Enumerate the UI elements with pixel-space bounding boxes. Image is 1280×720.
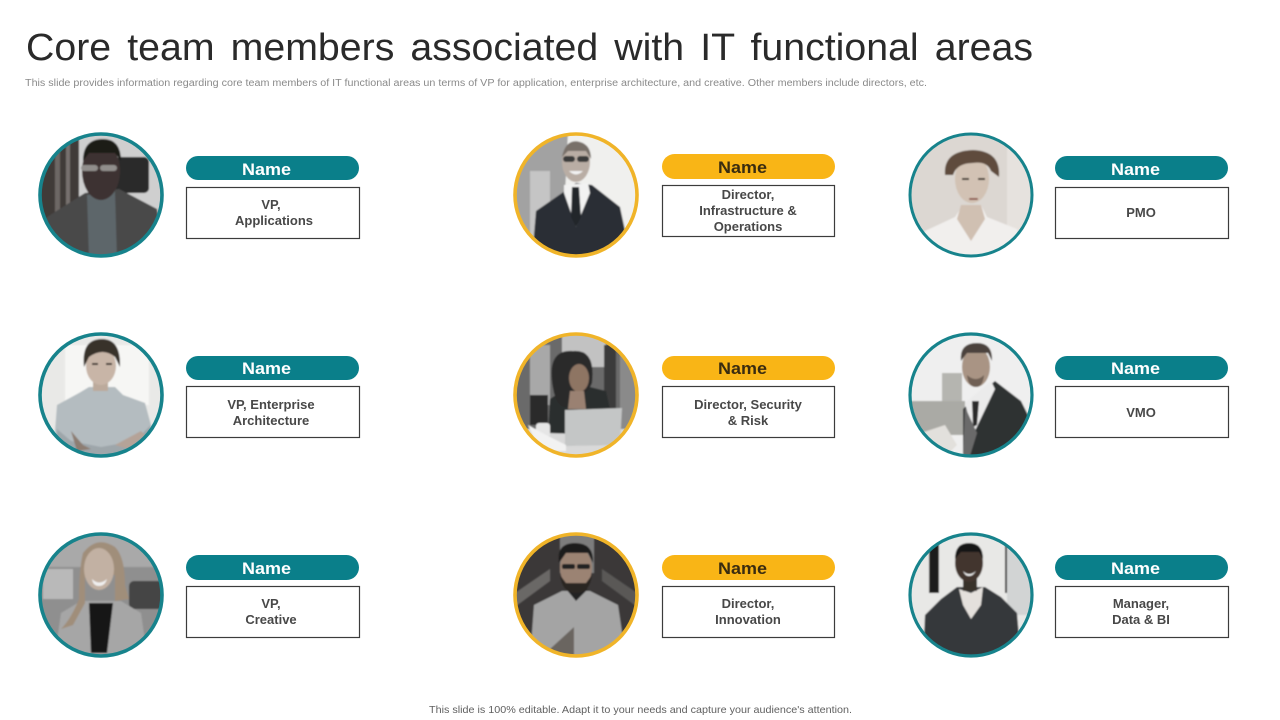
role box: Director, Security <box>694 397 803 412</box>
role box <box>186 386 360 438</box>
portrait: woman at laptop <box>512 331 640 459</box>
name pill: Name <box>718 560 767 578</box>
name pill: Name <box>242 560 291 578</box>
portrait: woman with short hair <box>907 131 1035 259</box>
name pill: Name <box>242 360 291 378</box>
name pill: Name <box>1111 161 1160 179</box>
name pill: Name <box>1111 360 1160 378</box>
name pill <box>662 356 835 380</box>
role box: Applications <box>235 213 313 228</box>
card: Director Security <box>512 331 835 459</box>
role box: Data & BI <box>1112 612 1170 627</box>
role box: VP, <box>261 596 281 611</box>
name pill <box>1055 356 1228 380</box>
portrait: man in dark cardigan <box>907 531 1035 659</box>
role box: Director, <box>722 596 774 611</box>
role box <box>186 188 360 238</box>
role box: VMO <box>1126 405 1156 420</box>
footer note: This slide is 100% editable. Adapt it to your needs and capture your audience's attention. <box>429 704 852 716</box>
name pill <box>1055 555 1228 580</box>
role box: Manager, <box>1113 596 1169 611</box>
role box <box>1056 386 1228 438</box>
portrait: blonde woman in grey blazer <box>37 531 165 659</box>
card: Director Infrastructure <box>512 131 835 259</box>
subtitle: This slide provides information regarding core team members of IT functional areas un terms of VP for application, enterprise architecture, and creative. Other members include directors, etc. <box>25 78 927 89</box>
card: VP Creative <box>37 531 360 659</box>
name pill <box>662 555 835 580</box>
card: Director Innovation <box>512 531 835 659</box>
portrait: bearded man with glasses <box>512 531 640 659</box>
role box: Innovation <box>715 612 781 627</box>
card: VP Applications <box>37 131 360 259</box>
role box <box>186 586 360 638</box>
role box: Creative <box>245 612 297 627</box>
card: PMO <box>907 131 1228 259</box>
card: Manager Data and BI <box>907 531 1228 659</box>
card: VMO <box>907 331 1228 459</box>
role box <box>1056 188 1228 238</box>
name pill <box>186 156 359 180</box>
name pill: Name <box>718 159 767 177</box>
role box: Operations <box>714 219 782 234</box>
portrait: man in tweed jacket <box>37 131 165 259</box>
role box <box>662 386 834 438</box>
portrait: woman in grey blouse <box>37 331 165 459</box>
role box: & Risk <box>728 413 769 428</box>
role box: Infrastructure & <box>699 203 797 218</box>
name pill <box>186 555 359 580</box>
role box: VP, Enterprise <box>227 397 315 412</box>
role box: Architecture <box>233 413 309 428</box>
role box <box>1056 586 1228 638</box>
title: Core team members associated with IT functional areas <box>26 27 1033 69</box>
role box <box>662 586 834 638</box>
portrait: man in suit with glasses <box>512 131 640 259</box>
name pill: Name <box>1111 560 1160 578</box>
role box: PMO <box>1126 205 1156 220</box>
name pill <box>186 356 359 380</box>
role box: Director, <box>722 187 774 202</box>
portrait: smiling man in dark suit <box>907 331 1035 459</box>
card: VP Enterprise Architecture <box>37 331 360 459</box>
role box: VP, <box>261 197 281 212</box>
name pill <box>1055 156 1228 180</box>
role box <box>662 186 834 236</box>
name pill: Name <box>718 360 767 378</box>
name pill: Name <box>242 161 291 179</box>
name pill <box>662 154 835 179</box>
